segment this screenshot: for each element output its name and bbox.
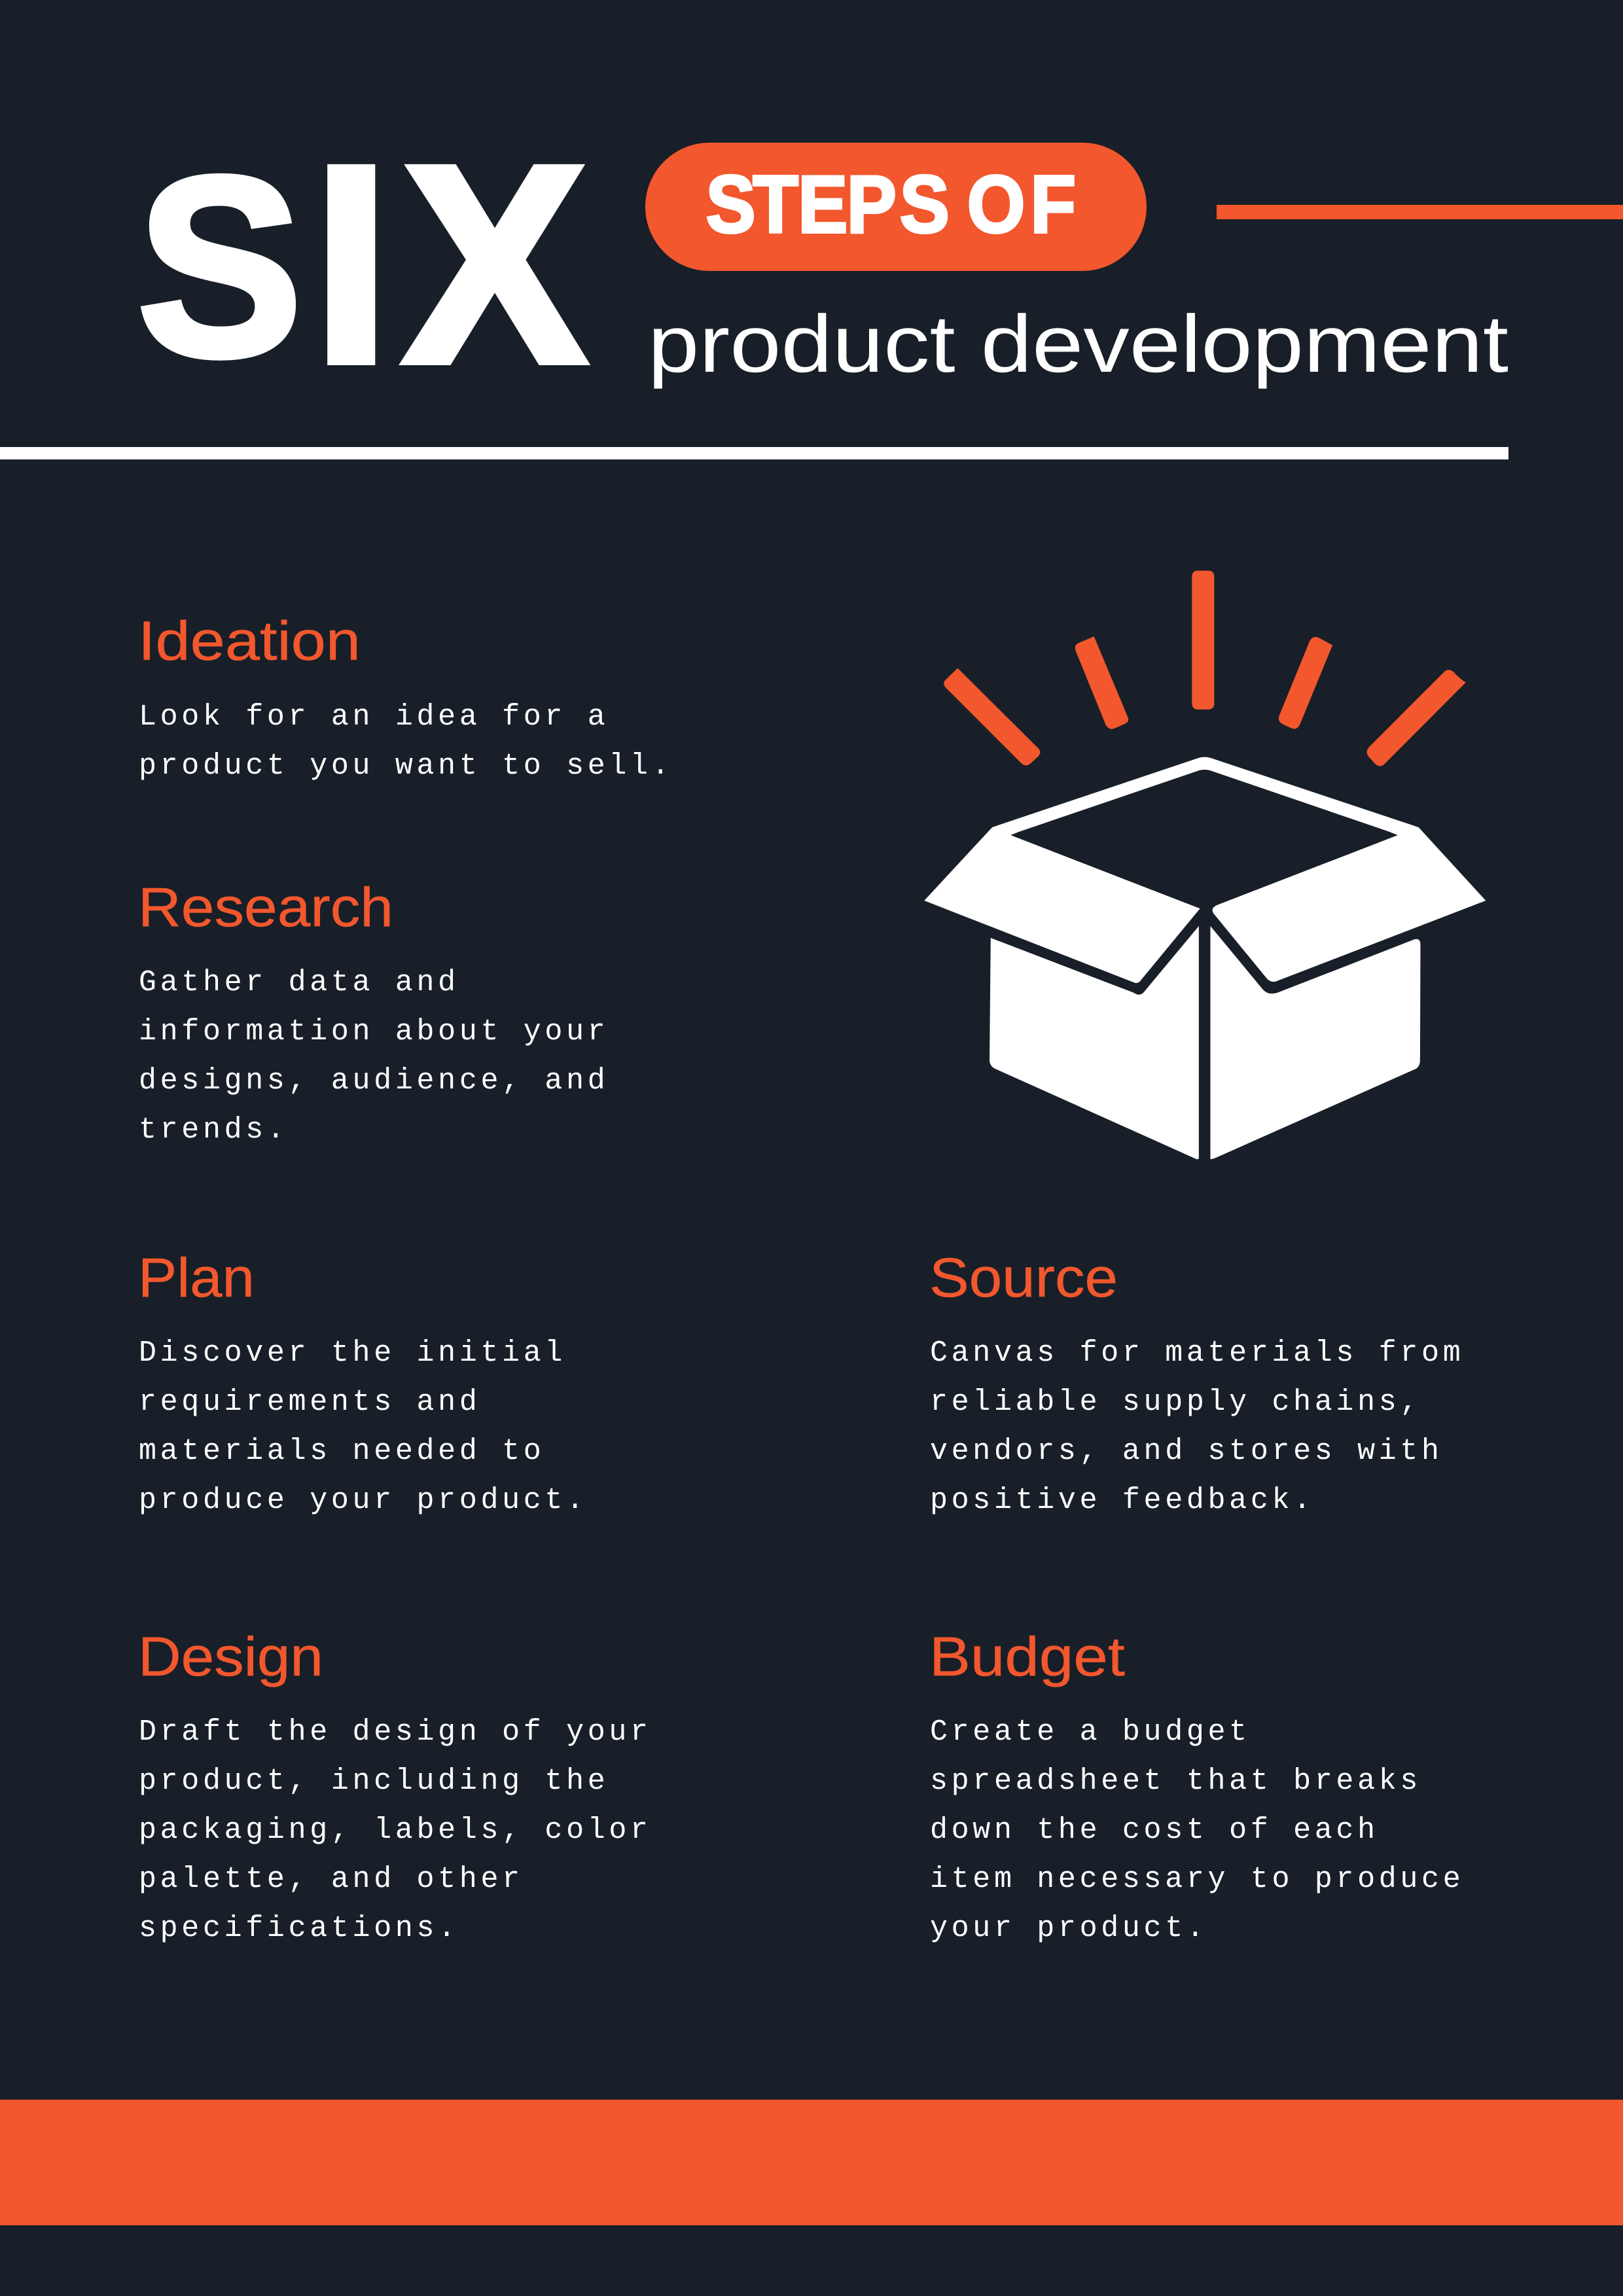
step: Research: designs, audience, and: [139, 1064, 609, 1098]
step: Research: [138, 876, 609, 1147]
step: Design: palette, and other: [139, 1863, 524, 1896]
step: Plan: [138, 1247, 588, 1517]
step: Research: Gather data and: [139, 966, 459, 999]
footer band: [0, 2100, 1623, 2225]
subtitle: product development: [648, 299, 1508, 389]
step: Budget: item necessary to produce: [930, 1863, 1464, 1896]
step: Research: trends.: [139, 1113, 289, 1147]
title pill: steps of: STEPS OF: [705, 160, 1076, 250]
step: Source: Source: [929, 1247, 1118, 1308]
step: Budget: Create a budget: [930, 1715, 1251, 1749]
step: Plan: produce your product.: [139, 1484, 588, 1517]
icon: open box with rays: [924, 571, 1486, 1159]
step: Ideation: Look for an idea for a: [139, 700, 609, 734]
step: Budget: spreadsheet that breaks: [930, 1765, 1421, 1798]
step: Budget: your product.: [930, 1912, 1208, 1945]
step: Source: vendors, and stores with: [930, 1435, 1443, 1468]
step: Source: Canvas for materials from: [930, 1336, 1464, 1370]
title: SIX: X: [404, 108, 586, 420]
step: Plan: Plan: [138, 1247, 255, 1308]
header rule: [0, 447, 1508, 459]
title: SIX: I: [313, 108, 389, 420]
icon: box body and flaps: [924, 757, 1486, 1159]
step: Research: Research: [138, 876, 393, 938]
step: Design: Design: [138, 1626, 323, 1687]
step: Plan: materials needed to: [139, 1435, 544, 1468]
accent line: [1217, 205, 1623, 219]
step: Ideation: product you want to sell.: [139, 749, 673, 783]
icon: rays: [944, 571, 1466, 766]
title pill: steps of: [645, 143, 1147, 271]
step: Ideation: [138, 610, 673, 783]
step: Design: product, including the: [139, 1765, 609, 1798]
step: Design: specifications.: [139, 1912, 459, 1945]
step: Research: information about your: [139, 1015, 609, 1049]
step: Budget: [929, 1626, 1464, 1945]
step: Source: reliable supply chains,: [930, 1386, 1421, 1419]
step: Source: [929, 1247, 1464, 1517]
step: Ideation: Ideation: [138, 610, 361, 672]
step: Design: [138, 1626, 652, 1945]
step: Design: packaging, labels, color: [139, 1814, 652, 1847]
title: SIX: S: [137, 124, 302, 409]
step: Plan: Discover the initial: [139, 1336, 566, 1370]
step: Source: positive feedback.: [930, 1484, 1315, 1517]
step: Design: Draft the design of your: [139, 1715, 652, 1749]
step: Budget: down the cost of each: [930, 1814, 1379, 1847]
step: Plan: requirements and: [139, 1386, 480, 1419]
step: Budget: Budget: [929, 1626, 1125, 1687]
